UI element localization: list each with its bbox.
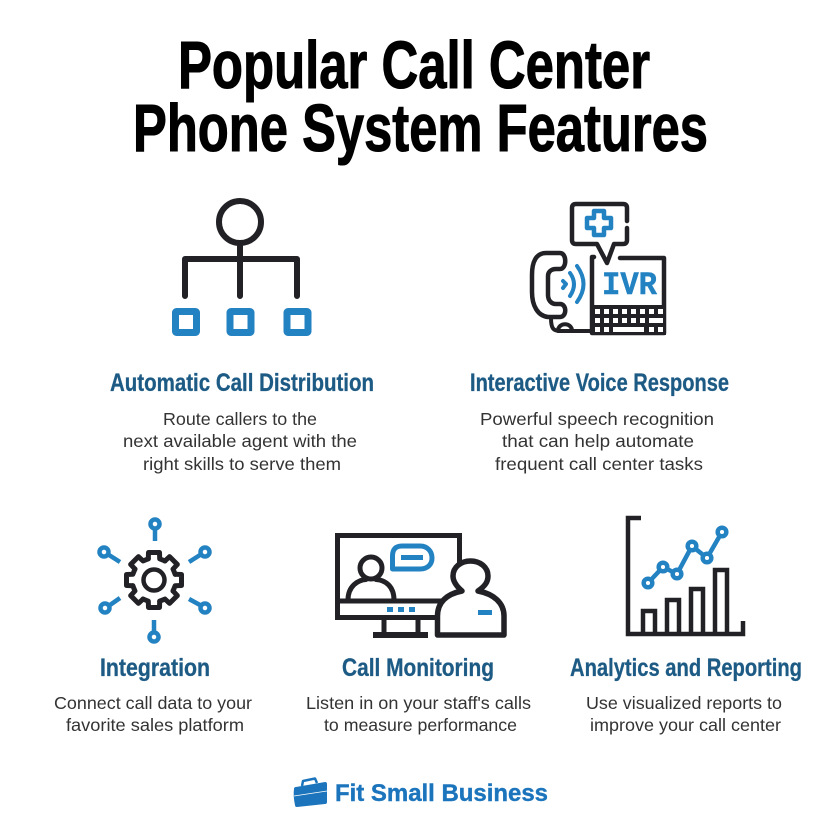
tablet body <box>592 257 664 333</box>
text: automatic call distribution description <box>123 409 357 474</box>
panel: interactive voice response <box>470 204 729 474</box>
heading: interactive voice response: Interactive Voice Response <box>470 369 729 397</box>
supervisor <box>438 561 504 635</box>
chat bubble <box>392 546 432 569</box>
text: analytics and reporting description <box>586 693 782 735</box>
handset cord <box>551 318 591 331</box>
panel: integration <box>54 520 252 735</box>
heading: integration: Integration <box>100 654 210 682</box>
icon: IVR phone <box>532 204 666 335</box>
monitor <box>338 536 460 635</box>
panel: automatic call distribution <box>110 201 374 474</box>
icon: monitor with supervisor <box>338 536 504 635</box>
icon: gear with connectors <box>100 520 210 642</box>
handset <box>532 253 565 317</box>
text: interactive voice response description: Powerful speech recognition <box>480 409 714 429</box>
title <box>133 28 708 166</box>
text: integration description: Connect call data to your <box>54 693 252 713</box>
sound waves <box>563 266 584 302</box>
text: call monitoring description: to measure performance <box>324 715 517 735</box>
keypad <box>591 305 666 335</box>
heading: call monitoring: Call Monitoring <box>342 654 494 682</box>
text: analytics and reporting description: improve your call center <box>590 715 781 735</box>
title: Popular Call Center <box>178 28 650 103</box>
text: analytics and reporting description: Use visualized reports to <box>586 693 782 713</box>
agent on screen <box>348 557 394 600</box>
icon: bar and line chart <box>628 518 743 634</box>
text: interactive voice response description: frequent call center tasks <box>495 454 703 474</box>
text: automatic call distribution description: right skills to serve them <box>143 454 341 474</box>
heading: automatic call distribution: Automatic Call Distribution <box>110 369 374 397</box>
text: automatic call distribution description: next available agent with the <box>123 431 357 451</box>
speech bubble <box>572 204 627 263</box>
panel: call monitoring <box>306 536 531 735</box>
wordmark: Fit Small Business <box>335 780 548 807</box>
icon: briefcase <box>294 778 327 807</box>
text: integration description <box>54 693 252 735</box>
text: call monitoring description <box>306 693 531 735</box>
text: interactive voice response description <box>480 409 714 474</box>
IVR label: IVR <box>602 267 658 304</box>
panel: analytics and reporting <box>570 518 802 735</box>
text: call monitoring description: Listen in on your staff's calls <box>306 693 531 713</box>
medical cross <box>587 211 611 235</box>
icon: hierarchy <box>176 201 308 332</box>
text: interactive voice response description: that can help automate <box>502 431 694 451</box>
logo: Fit Small Business <box>294 778 548 807</box>
monitor dots <box>387 607 415 612</box>
text: automatic call distribution description: Route callers to the <box>163 409 317 429</box>
text: integration description: favorite sales platform <box>66 715 244 735</box>
